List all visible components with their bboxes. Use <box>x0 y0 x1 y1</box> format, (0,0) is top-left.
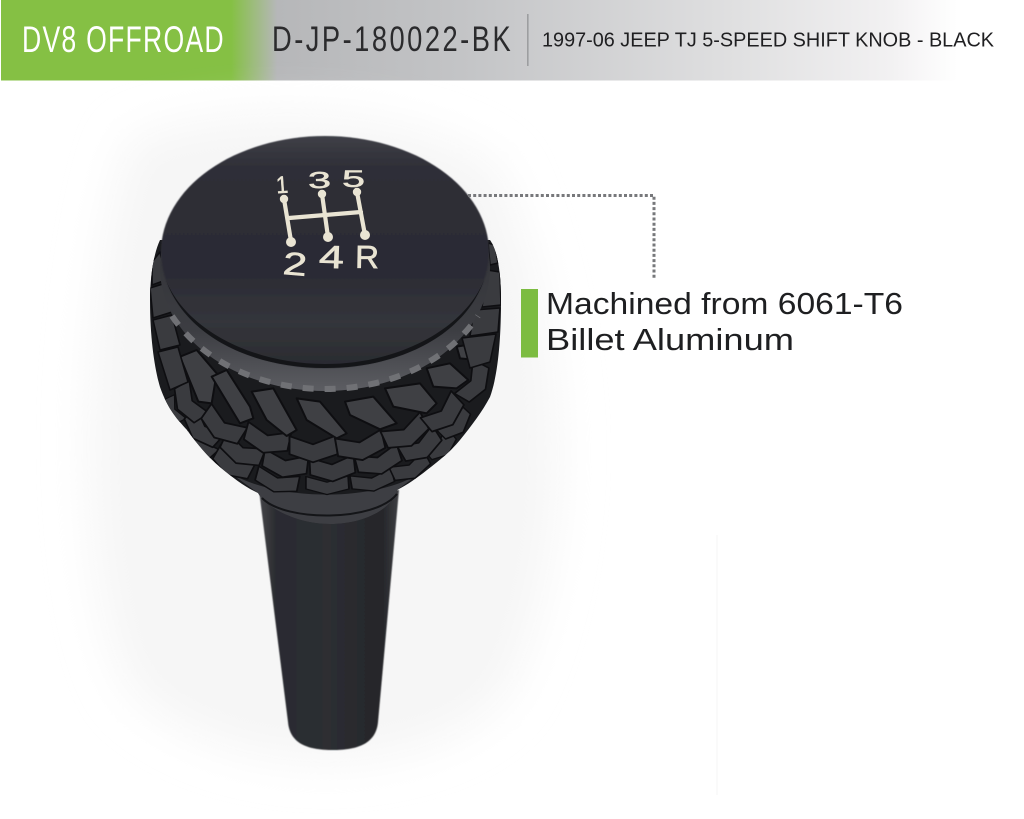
aluminum cap <box>161 136 489 368</box>
clipped tread pattern <box>150 243 501 498</box>
upper gear numbers <box>275 166 365 199</box>
lower gear numbers: R <box>355 239 379 275</box>
brand name: DV8 OFFROAD <box>22 19 224 60</box>
photo backdrop glow <box>89 115 559 761</box>
inner tread row <box>182 344 470 438</box>
third tread row <box>157 394 476 483</box>
lower gear numbers <box>281 239 379 283</box>
shift knob photo <box>150 136 501 750</box>
upper gear numbers: 5 <box>342 166 365 193</box>
second tread row <box>168 359 496 464</box>
upper gear numbers: 3 <box>308 167 331 193</box>
lower gear numbers: 2 <box>281 245 309 283</box>
outer tread row <box>187 430 457 496</box>
knob collar <box>160 145 490 391</box>
knob shaft <box>259 490 399 750</box>
callout text: Billet Aluminum <box>546 322 794 357</box>
callout <box>521 286 903 358</box>
callout text <box>546 286 903 357</box>
upper gear numbers: 1 <box>275 172 289 199</box>
header bar <box>1 0 1024 80</box>
shift pattern engraving <box>275 166 379 283</box>
tire tread body <box>150 240 501 524</box>
callout text: Machined from 6061-T6 <box>546 286 903 321</box>
lower gear numbers: 4 <box>318 239 345 275</box>
part number: D-JP-180022-BK <box>272 20 511 59</box>
shift lines <box>284 192 365 241</box>
side tread blocks <box>150 243 501 390</box>
product title: 1997-06 JEEP TJ 5-SPEED SHIFT KNOB - BLACK <box>542 30 995 52</box>
callout accent bar <box>521 289 538 358</box>
dotted leader line <box>468 196 654 279</box>
